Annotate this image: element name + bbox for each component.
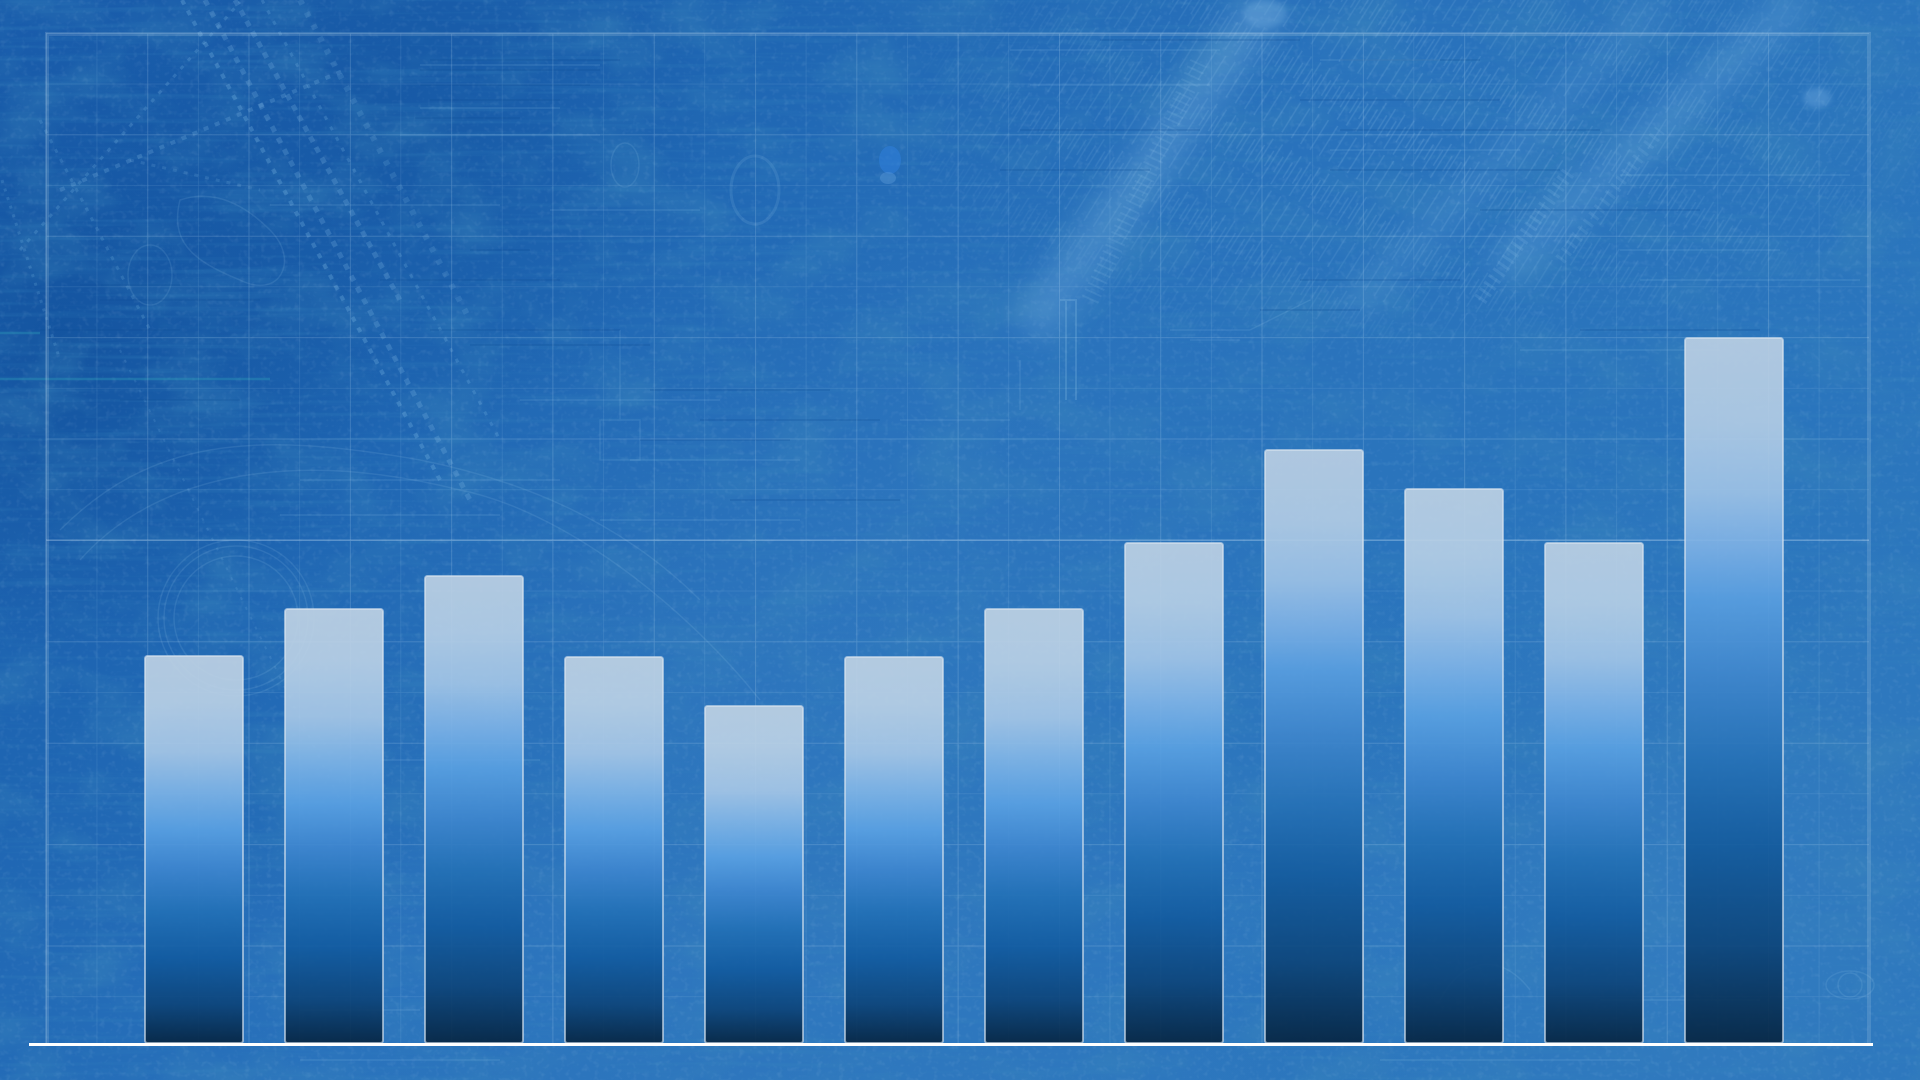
bar 11 [1545, 543, 1643, 1043]
bar 12 [1685, 338, 1783, 1043]
bar 7 [985, 609, 1083, 1043]
chart baseline [29, 1043, 1873, 1046]
bar 1 [145, 656, 243, 1043]
bar 6 [845, 657, 943, 1043]
bar 10 [1405, 489, 1503, 1043]
bar 2 [285, 609, 383, 1043]
bar 8 [1125, 543, 1223, 1043]
bar 4 [565, 657, 663, 1043]
bar 5 [705, 706, 803, 1043]
bar 3 [425, 576, 523, 1043]
bar chart [145, 338, 1783, 1043]
bar 9 [1265, 450, 1363, 1043]
